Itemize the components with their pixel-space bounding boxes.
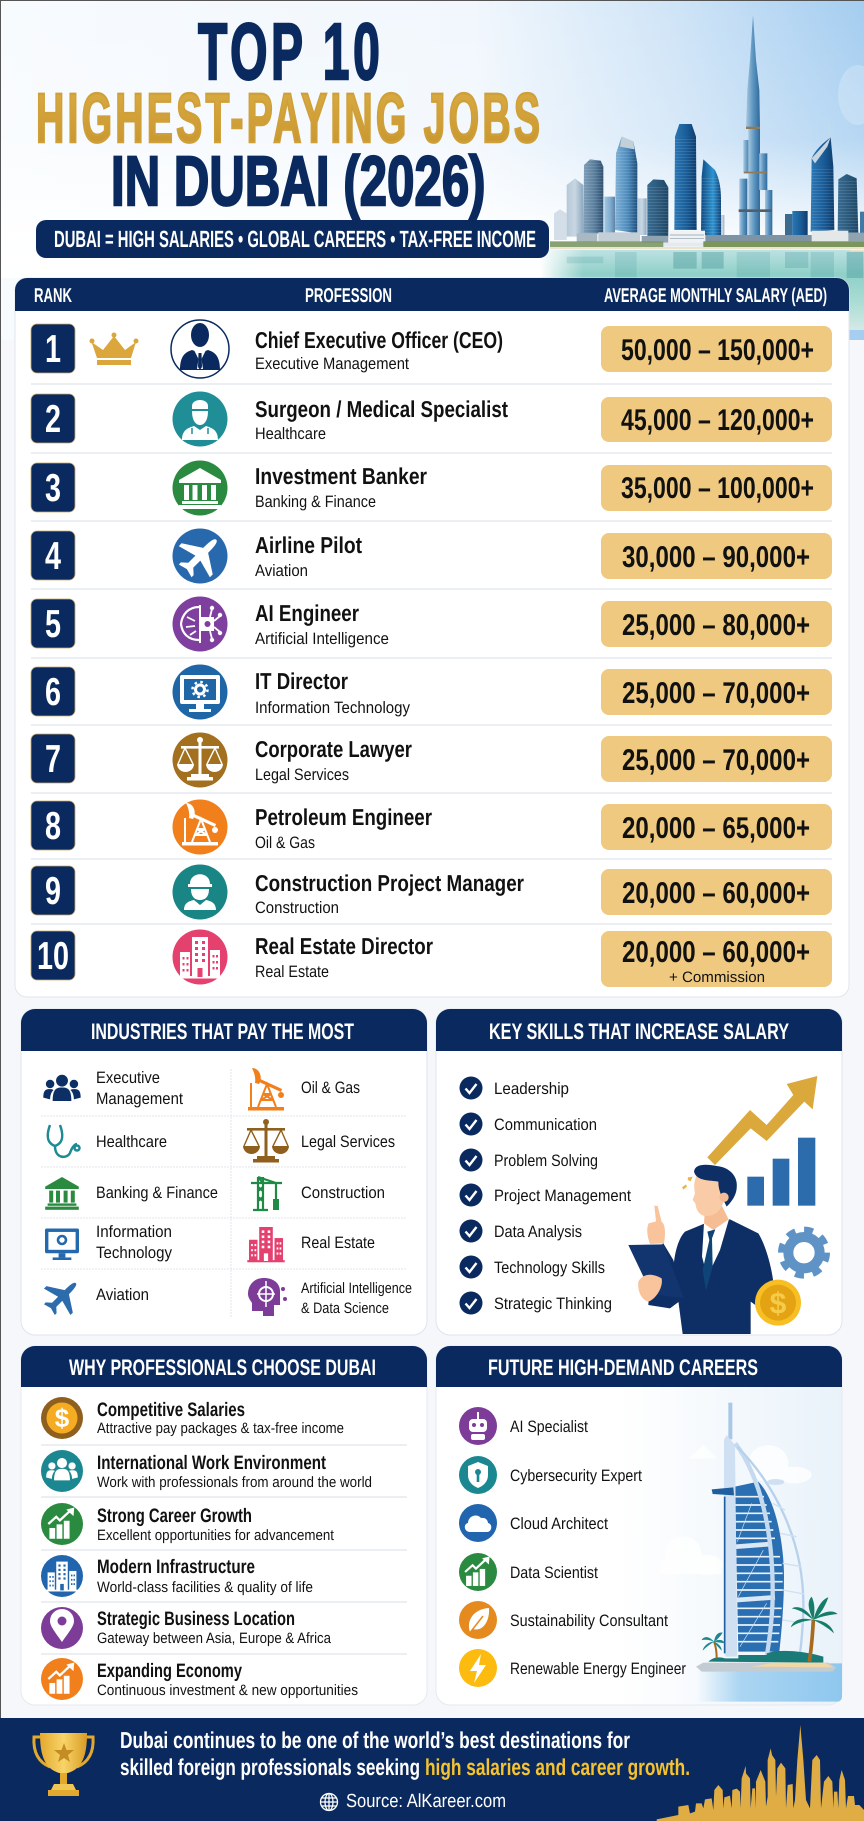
item: artificial intelligence and data science	[248, 1278, 412, 1317]
illustration: gold skyline	[657, 1725, 864, 1821]
row 8: petroleum engineer: 20,000 – 65,000+	[622, 812, 810, 845]
item: executive management	[43, 1069, 183, 1108]
row 9: construction project manager: 20,000 – 60,000+	[622, 877, 810, 910]
row 3: investment banker: 3	[45, 467, 61, 510]
skill: data analysis: Data Analysis	[494, 1223, 582, 1241]
skill: strategic thinking: Strategic Thinking	[494, 1295, 612, 1313]
heading: WHY PROFESSIONALS CHOOSE DUBAI	[69, 1355, 376, 1380]
icon: coin	[755, 1280, 801, 1326]
row 8: petroleum engineer	[31, 800, 832, 854]
icon: oil derrick	[172, 800, 228, 854]
closing statement: Dubai continues to be one of the world’s best destinations for	[120, 1727, 630, 1753]
table header: RANK	[34, 285, 72, 307]
row 5: AI engineer: Artificial Intelligence	[255, 630, 389, 648]
reason: expanding economy: Expanding Economy	[97, 1660, 242, 1682]
row 6: IT director: 25,000 – 70,000+	[622, 677, 810, 710]
icon: hard hat worker	[172, 864, 228, 920]
icon: bank	[172, 460, 228, 516]
subtitle banner	[36, 220, 549, 258]
item: legal services	[243, 1119, 395, 1162]
career: sustainability consultant: Sustainability Consultant	[510, 1612, 668, 1630]
item: banking and finance: Banking & Finance	[96, 1184, 218, 1202]
closing statement: high salaries and career growth.	[425, 1754, 690, 1780]
footer banner	[0, 1718, 864, 1821]
icon: monitor	[172, 664, 228, 720]
row 8: petroleum engineer: Oil & Gas	[255, 834, 315, 852]
row 9: construction project manager: Construction	[255, 899, 339, 917]
item: oil and gas: Oil & Gas	[301, 1079, 360, 1097]
closing statement: skilled foreign professionals seeking	[120, 1754, 420, 1780]
reason: competitive salaries: Attractive pay packages & tax-free income	[97, 1420, 344, 1437]
reason: competitive salaries: Competitive Salaries	[97, 1399, 245, 1421]
row 4: airline pilot: Airline Pilot	[255, 532, 362, 558]
reason: competitive salaries: $	[55, 1403, 70, 1433]
item: executive management: Management	[96, 1090, 183, 1108]
item: information technology	[45, 1223, 173, 1262]
table header	[15, 278, 849, 311]
item: information technology: Technology	[96, 1244, 173, 1262]
skill: problem solving	[460, 1148, 598, 1172]
row 4: airline pilot: Aviation	[255, 562, 308, 580]
icon: executive	[171, 320, 229, 378]
icon: scales	[172, 732, 228, 788]
item: real estate: Real Estate	[301, 1234, 375, 1252]
icon: plane	[170, 524, 232, 586]
Dubai skyline photo	[540, 15, 864, 330]
item: banking and finance	[45, 1177, 218, 1210]
row 3: investment banker: Investment Banker	[255, 463, 427, 489]
row 4: airline pilot: 30,000 – 90,000+	[622, 541, 810, 574]
row 6: IT director	[31, 664, 832, 720]
reason: international work environment: Work with professionals from around the world	[97, 1474, 372, 1491]
reason: modern infrastructure: World-class facilities & quality of life	[97, 1579, 313, 1596]
row 9: construction project manager: Construction Project Manager	[255, 870, 524, 896]
skill: project management: Project Management	[494, 1187, 631, 1205]
row 2: surgeon: 2	[45, 398, 61, 441]
item: artificial intelligence and data science: Artificial Intelligence	[301, 1280, 412, 1297]
row 5: AI engineer	[31, 596, 832, 652]
row 7: corporate lawyer	[31, 732, 832, 788]
row 7: corporate lawyer: 25,000 – 70,000+	[622, 744, 810, 777]
row 10: real estate director: 20,000 – 60,000+	[622, 936, 810, 969]
row 1: CEO	[31, 320, 832, 378]
skill: technology skills	[460, 1256, 605, 1278]
reason: strong career growth	[41, 1503, 335, 1545]
reason: competitive salaries	[41, 1397, 344, 1439]
reason: strong career growth: Excellent opportunities for advancement	[97, 1527, 335, 1544]
item: legal services: Legal Services	[301, 1133, 395, 1151]
icon: AI brain	[172, 596, 228, 652]
reason: expanding economy	[41, 1658, 358, 1700]
arrow: growth	[707, 1076, 817, 1165]
row 1: CEO: Executive Management	[255, 355, 409, 373]
career: cloud architect: Cloud Architect	[510, 1515, 608, 1533]
row 4: airline pilot	[31, 524, 832, 586]
icon: gear	[782, 1231, 826, 1275]
icon: surgeon	[172, 392, 228, 446]
row 2: surgeon: Healthcare	[255, 425, 326, 443]
subtitle banner: DUBAI = HIGH SALARIES • GLOBAL CAREERS • TAX-FREE INCOME	[54, 226, 536, 252]
career: renewable energy engineer: Renewable Energy Engineer	[510, 1660, 686, 1678]
item: artificial intelligence and data science: & Data Science	[301, 1300, 389, 1317]
reason: strong career growth: Strong Career Growth	[97, 1505, 252, 1527]
row 7: corporate lawyer: 7	[45, 738, 61, 781]
row 10: real estate director	[31, 930, 832, 987]
row 3: investment banker	[31, 460, 832, 516]
row 7: corporate lawyer: Legal Services	[255, 766, 349, 784]
item: aviation	[36, 1270, 149, 1323]
row 2: surgeon: Surgeon / Medical Specialist	[255, 396, 508, 422]
row 1: CEO: Chief Executive Officer (CEO)	[255, 327, 503, 353]
career: data scientist	[459, 1553, 598, 1591]
heading: INDUSTRIES THAT PAY THE MOST	[91, 1019, 354, 1044]
skill: strategic thinking	[460, 1292, 612, 1314]
career: AI specialist	[459, 1407, 588, 1445]
item: executive management: Executive	[96, 1069, 160, 1087]
row 7: corporate lawyer: Corporate Lawyer	[255, 736, 412, 762]
panel: industries that pay the most	[21, 1009, 427, 1335]
source line: Source: AlKareer.com	[346, 1791, 506, 1812]
row 5: AI engineer: 25,000 – 80,000+	[622, 609, 810, 642]
illustration: Burj Al Arab	[660, 1403, 842, 1702]
row 10: real estate director: 10	[37, 935, 69, 978]
panel: key skills that increase salary	[436, 1009, 842, 1335]
item: construction	[251, 1177, 385, 1210]
career: cybersecurity expert: Cybersecurity Expert	[510, 1467, 642, 1485]
career: data scientist: Data Scientist	[510, 1564, 598, 1582]
item: healthcare: Healthcare	[96, 1133, 167, 1151]
career: AI specialist: AI Specialist	[510, 1418, 588, 1436]
row 3: investment banker: Banking & Finance	[255, 493, 376, 511]
icon: coin: $	[770, 1287, 786, 1320]
career: cloud architect	[459, 1504, 608, 1542]
reason: expanding economy: Continuous investment & new opportunities	[97, 1682, 358, 1699]
item: real estate	[247, 1227, 375, 1262]
title: IN DUBAI (2026)	[111, 142, 485, 220]
item: information technology: Information	[96, 1223, 172, 1241]
icon: buildings	[172, 930, 228, 984]
reason: strategic business location: Gateway between Asia, Europe & Africa	[97, 1630, 332, 1647]
skill: leadership: Leadership	[494, 1080, 569, 1098]
skill: problem solving: Problem Solving	[494, 1152, 598, 1170]
row 1: CEO: 1	[45, 328, 61, 371]
career: sustainability consultant	[459, 1601, 668, 1639]
reason: modern infrastructure	[41, 1555, 313, 1597]
item: healthcare	[48, 1125, 167, 1157]
reason: international work environment	[41, 1450, 372, 1492]
title	[36, 7, 540, 220]
closing statement	[120, 1727, 690, 1780]
reason: international work environment: International Work Environment	[97, 1452, 326, 1474]
title: HIGHEST-PAYING JOBS	[36, 79, 540, 157]
reason: strategic business location	[41, 1607, 332, 1649]
row 9: construction project manager: 9	[45, 870, 61, 913]
row 6: IT director: Information Technology	[255, 699, 411, 717]
icon: crown	[90, 332, 138, 365]
table header: PROFESSION	[305, 285, 392, 307]
career: renewable energy engineer	[459, 1649, 686, 1687]
skill: leadership	[460, 1076, 569, 1100]
item: aviation: Aviation	[96, 1286, 149, 1304]
panel: why professionals choose Dubai	[21, 1346, 427, 1705]
item: construction: Construction	[301, 1184, 385, 1202]
skill: communication: Communication	[494, 1116, 597, 1134]
skill: communication	[460, 1112, 597, 1136]
skill: data analysis	[460, 1220, 582, 1242]
row 9: construction project manager	[31, 864, 832, 920]
row 8: petroleum engineer: 8	[45, 805, 61, 848]
row 6: IT director: 6	[45, 671, 61, 714]
illustration: businessman with growth chart	[628, 1076, 826, 1334]
item: oil and gas	[248, 1068, 360, 1110]
row 4: airline pilot: 4	[45, 535, 61, 578]
icon: trophy	[34, 1733, 93, 1796]
row 10: real estate director: Real Estate	[255, 963, 329, 981]
row 5: AI engineer: AI Engineer	[255, 600, 359, 626]
skill: project management	[460, 1184, 631, 1206]
row 6: IT director: IT Director	[255, 668, 348, 694]
row 10: real estate director: Real Estate Director	[255, 933, 433, 959]
reason: strategic business location: Strategic Business Location	[97, 1608, 295, 1630]
row 2: surgeon	[31, 392, 832, 446]
panel: future high-demand careers	[436, 1346, 842, 1705]
skill: technology skills: Technology Skills	[494, 1259, 605, 1277]
heading: FUTURE HIGH-DEMAND CAREERS	[488, 1355, 758, 1380]
row 5: AI engineer: 5	[45, 603, 61, 646]
row 8: petroleum engineer: Petroleum Engineer	[255, 804, 432, 830]
reason: modern infrastructure: Modern Infrastructure	[97, 1556, 255, 1578]
title: TOP 10	[198, 7, 380, 96]
row 10: real estate director: + Commission	[669, 969, 765, 986]
career: cybersecurity expert	[459, 1456, 642, 1494]
bar chart	[747, 1138, 815, 1206]
header background sky	[0, 0, 864, 340]
panel: salary table	[15, 278, 849, 997]
